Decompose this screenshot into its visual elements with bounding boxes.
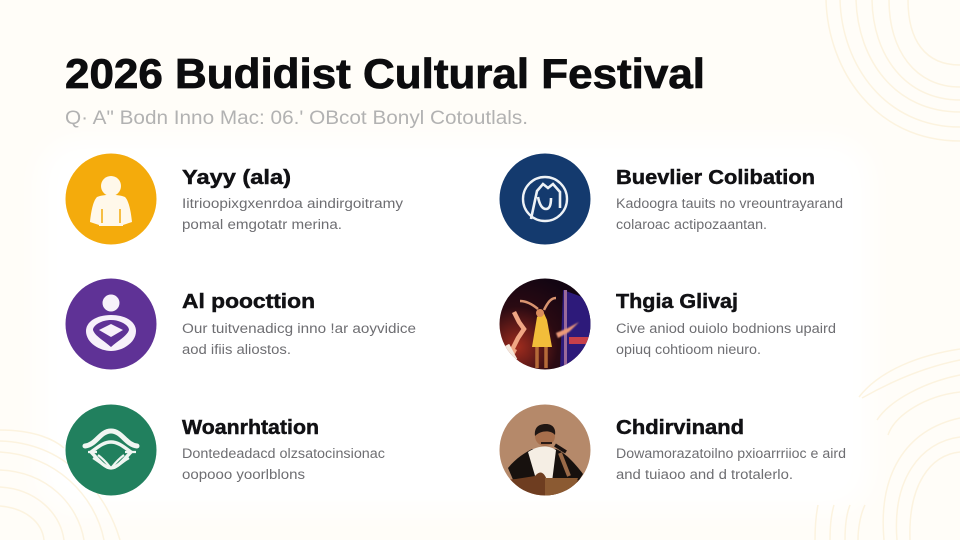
title: 2026 Budidist Cultural Festival xyxy=(65,50,705,97)
icon: speaker at lectern photo xyxy=(499,404,591,500)
panel: Al poocttion xyxy=(66,278,416,370)
description xyxy=(616,321,836,357)
panel: Buevlier Colibation xyxy=(500,154,843,244)
description: oopooo yoorlblons xyxy=(182,467,305,482)
description xyxy=(616,196,843,232)
decorative concentric arcs: bottom left xyxy=(0,430,120,540)
description: Dowamorazatoilno pxioarrriioc e aird xyxy=(616,446,846,461)
icon: lotus emblem on green circle xyxy=(66,404,156,496)
panel: Woanrhtation xyxy=(66,404,385,496)
icon: meditating figure on purple circle xyxy=(66,278,156,370)
soft white content glow xyxy=(40,140,870,510)
description xyxy=(182,321,416,357)
description: Cive aniod ouiolo bodnions upaird xyxy=(616,321,836,336)
description xyxy=(182,446,385,482)
panel: Thgia Glivaj xyxy=(499,278,836,370)
description: aod ifiis aliostos. xyxy=(182,342,291,357)
description: and tuiaoo and d trotalerlo. xyxy=(616,467,793,482)
icon: person on amber circle xyxy=(66,154,156,244)
description xyxy=(182,196,403,232)
icon: emblem on navy circle xyxy=(500,154,590,244)
description xyxy=(616,446,846,482)
description: opiuq cohtioom nieuro. xyxy=(616,342,761,357)
description: Our tuitvenadicg inno !ar aoyvidice xyxy=(182,321,416,336)
subtitle: Q· A" Bodn Inno Mac: 06.' OBcot Bonyl Cotoutlals. xyxy=(65,108,528,129)
description: Iitrioopixgxenrdoa aindirgoitramy xyxy=(182,196,403,211)
panel: Yayy (ala) xyxy=(66,154,403,244)
description: pomal emgotatr merina. xyxy=(182,217,342,232)
panel: Chdirvinand xyxy=(499,404,846,500)
heading: Woanrhtation xyxy=(182,417,319,439)
description: colaroac actipozaantan. xyxy=(616,217,767,232)
heading: Yayy (ala) xyxy=(182,167,291,189)
heading: Chdirvinand xyxy=(616,417,744,439)
description: Dontedeadacd olzsatocinsionac xyxy=(182,446,385,461)
heading: Al poocttion xyxy=(182,291,315,313)
decorative concentric arcs: top right xyxy=(826,0,960,141)
heading: Thgia Glivaj xyxy=(616,291,738,313)
icon: stage performance photo xyxy=(499,278,591,370)
decorative concentric arcs: bottom right xyxy=(815,349,960,540)
heading: Buevlier Colibation xyxy=(616,167,815,189)
description: Kadoogra tauits no vreountrayarand xyxy=(616,196,843,211)
